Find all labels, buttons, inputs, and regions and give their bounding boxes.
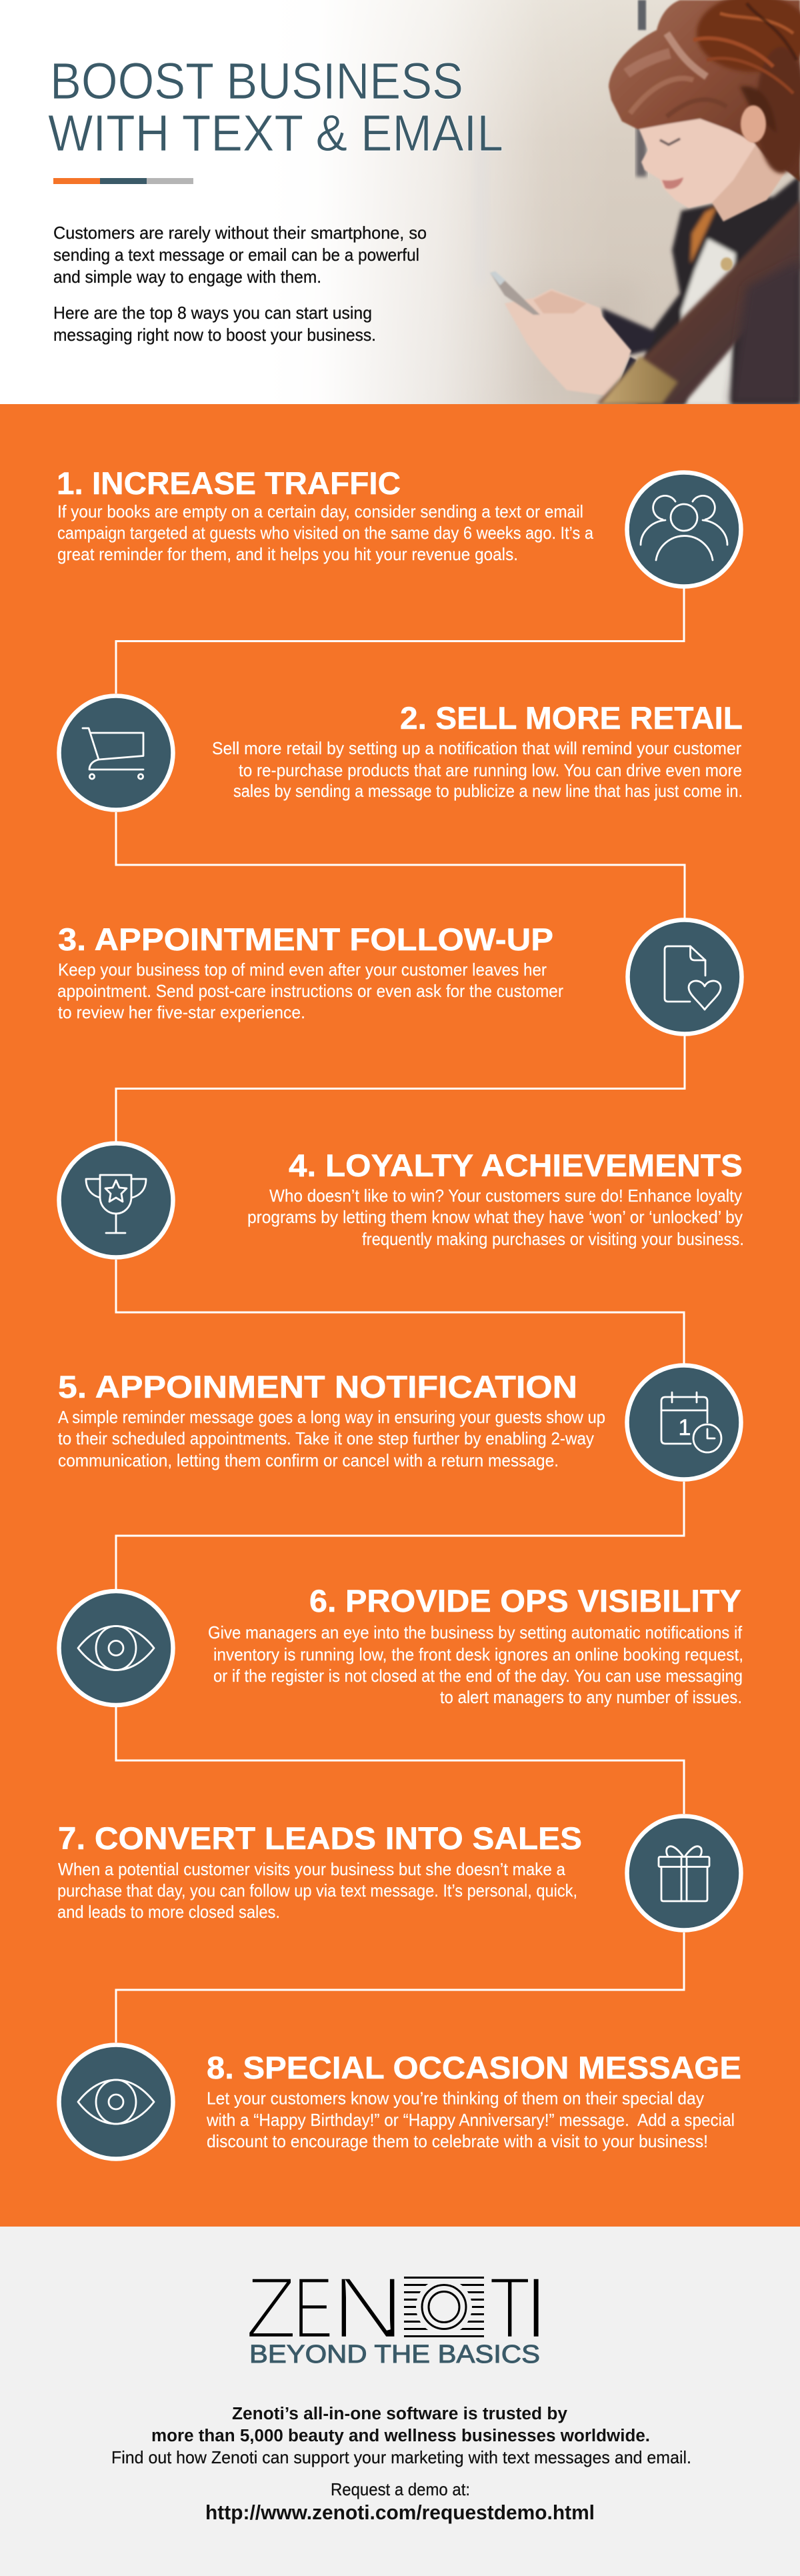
step 3: appointment follow-up: 3. APPOINTMENT FOLLOW-UP — [58, 922, 553, 957]
icon: calendar with clock: 1 — [679, 1415, 691, 1440]
step 6: provide ops visibility: Give managers an eye into the business by setting automatic notifications if — [208, 1622, 743, 1642]
title: BOOST BUSINESS — [50, 53, 463, 110]
step 6: provide ops visibility: or if the register is not closed at the end of the day. You can use messaging — [213, 1666, 743, 1686]
step 8: special occasion message: discount to encourage them to celebrate with a visit to your business! — [207, 2131, 708, 2151]
step 5: appointment notification: to their scheduled appointments. Take it one step further by enabling 2-way — [58, 1428, 594, 1448]
footer text: Zenoti’s all-in-one software is trusted by — [232, 2405, 568, 2423]
icon: gift box — [627, 1816, 741, 1930]
intro text: Here are the top 8 ways you can start using — [53, 303, 372, 323]
logo: Zenoti: T — [489, 2259, 531, 2358]
title: WITH TEXT & EMAIL — [48, 105, 503, 162]
step 2: sell more retail: 2. SELL MORE RETAIL — [400, 700, 743, 736]
step 5: appointment notification: 5. APPOINMENT NOTIFICATION — [58, 1369, 577, 1404]
footer text: more than 5,000 beauty and wellness businesses worldwide. — [151, 2427, 650, 2445]
logo: Zenoti — [245, 2259, 549, 2358]
connector lines between steps — [116, 588, 685, 2043]
step 6: provide ops visibility: 6. PROVIDE OPS VISIBILITY — [309, 1583, 741, 1618]
logo: Zenoti: I — [524, 2259, 549, 2358]
step 7: convert leads into sales: 7. CONVERT LEADS INTO SALES — [58, 1820, 582, 1856]
panel: footer background — [0, 2227, 800, 2576]
hero photo: woman using smartphone — [348, 0, 800, 404]
step 2: sell more retail: sales by sending a message to publicize a new line that has just come in. — [233, 781, 743, 801]
step 5: appointment notification: communication, letting them confirm or cancel with a return message. — [58, 1450, 559, 1470]
logo: Zenoti: E — [293, 2259, 333, 2358]
step 4: loyalty achievements: programs by letting them know what they have ‘won’ or ‘unlocked’ by — [247, 1207, 743, 1227]
footer text: Find out how Zenoti can support your marketing with text messages and email. — [111, 2447, 691, 2467]
icon: eye — [59, 1591, 173, 1705]
step 8: special occasion message: with a “Happy Birthday!” or “Happy Anniversary!” message. Add a special — [206, 2110, 735, 2130]
step 4: loyalty achievements: 4. LOYALTY ACHIEVEMENTS — [289, 1148, 743, 1183]
tagline: beyond the basics: BEYOND THE BASICS — [249, 2341, 540, 2369]
step 1: increase traffic: If your books are empty on a certain day, consider sending a text or email — [57, 501, 583, 521]
step 1: increase traffic — [57, 465, 593, 564]
icon: shopping cart — [59, 696, 173, 810]
icon: trophy with star — [59, 1143, 173, 1258]
step 3: appointment follow-up: appointment. Send post-care instructions or even ask for the customer — [57, 981, 563, 1001]
step 6: provide ops visibility: inventory is running low, the front desk ignores an online booking request, — [213, 1644, 743, 1664]
intro text: Customers are rarely without their smartphone, so — [53, 223, 427, 243]
logo mark: striped concentric O — [404, 2278, 484, 2337]
step 2: sell more retail: to re-purchase products that are running low. You can drive even more — [239, 760, 742, 780]
intro text: sending a text message or email can be a powerful — [53, 245, 419, 265]
logo: Zenoti: N — [331, 2259, 405, 2358]
icon: document with heart — [628, 920, 741, 1034]
footer text: Request a demo at: — [331, 2479, 470, 2499]
step 7: convert leads into sales — [57, 1820, 582, 1922]
footer text — [111, 2405, 691, 2524]
step 7: convert leads into sales: purchase that day, you can follow up via text message. It’s personal, quick, — [57, 1880, 577, 1900]
step 4: loyalty achievements — [247, 1148, 744, 1249]
icon: group of people — [627, 472, 741, 587]
step 6: provide ops visibility: to alert managers to any number of issues. — [440, 1687, 742, 1707]
step 7: convert leads into sales: and leads to more closed sales. — [57, 1902, 280, 1922]
panel: orange background — [0, 404, 800, 2227]
intro text — [53, 223, 427, 345]
icon: calendar with clock — [627, 1366, 741, 1479]
step 8: special occasion message: 8. SPECIAL OCCASION MESSAGE — [207, 2050, 741, 2085]
step 7: convert leads into sales: When a potential customer visits your business but she doesn’t make a — [58, 1859, 565, 1879]
step 5: appointment notification: A simple reminder message goes a long way in ensuring your guests show up — [58, 1407, 605, 1427]
step 6: provide ops visibility — [208, 1583, 743, 1707]
step 3: appointment follow-up: to review her five-star experience. — [58, 1002, 305, 1022]
step 1: increase traffic: 1. INCREASE TRAFFIC — [57, 465, 401, 501]
step 8: special occasion message — [206, 2050, 741, 2151]
step 3: appointment follow-up — [57, 922, 563, 1022]
step 1: increase traffic: great reminder for them, and it helps you hit your revenue goals. — [57, 544, 518, 564]
logo: Zenoti: Z — [245, 2259, 297, 2358]
step 2: sell more retail: Sell more retail by setting up a notification that will remind your customer — [212, 738, 741, 758]
step 1: increase traffic: campaign targeted at guests who visited on the same day 6 weeks ago. It’s a — [57, 523, 593, 543]
step 3: appointment follow-up: Keep your business top of mind even after your customer leaves her — [58, 960, 547, 980]
step 8: special occasion message: Let your customers know you’re thinking of them on their special day — [207, 2089, 704, 2109]
footer text: http://www.zenoti.com/requestdemo.html — [205, 2501, 595, 2524]
step 2: sell more retail — [212, 700, 743, 801]
intro text: and simple way to engage with them. — [53, 267, 321, 287]
tri-colour divider bar — [53, 178, 193, 184]
step 4: loyalty achievements: frequently making purchases or visiting your business. — [362, 1229, 744, 1249]
step 4: loyalty achievements: Who doesn’t like to win? Your customers sure do! Enhance loyalty — [269, 1186, 742, 1206]
title — [48, 53, 503, 162]
step 5: appointment notification — [58, 1369, 605, 1470]
icon: eye (special occasion) — [59, 2045, 173, 2159]
intro text: messaging right now to boost your business. — [53, 325, 376, 345]
